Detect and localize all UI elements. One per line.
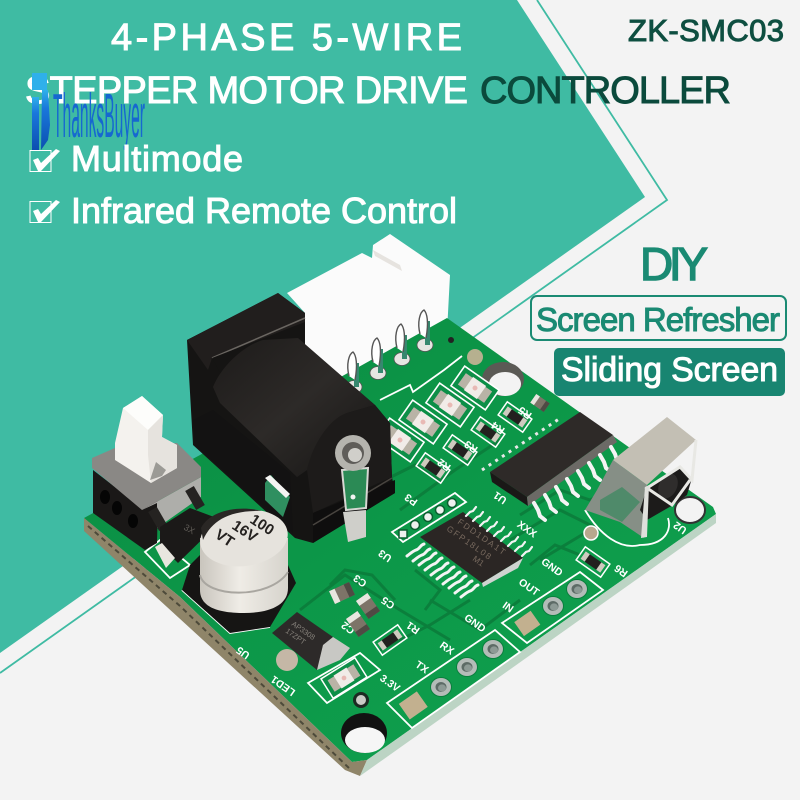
silkscreen labels: R5	[516, 404, 534, 421]
silkscreen labels: LED1	[269, 673, 298, 698]
IR receiver	[584, 417, 705, 540]
screw terminal pads upper	[514, 579, 588, 636]
title line 2 dark part: CONTROLLER	[480, 70, 731, 112]
electrolytic capacitor: VT	[212, 526, 237, 551]
silkscreen labels: R2	[435, 456, 453, 473]
silkscreen outlines	[145, 356, 669, 728]
push button switch	[92, 396, 205, 550]
electrolytic capacitor	[182, 504, 296, 633]
chip U3: GFP18L08	[445, 523, 493, 562]
PCB right edge	[360, 514, 716, 776]
silkscreen labels: OUT	[516, 576, 542, 599]
watermark logo	[32, 73, 145, 151]
top mounting hole	[482, 362, 524, 396]
PCB front edge texture	[88, 526, 350, 769]
pad by connector	[448, 337, 483, 365]
silkscreen labels: TX	[413, 659, 431, 676]
chip U3: M1	[471, 553, 486, 569]
connector pins	[346, 310, 433, 394]
title line 1: 4-PHASE 5-WIRE	[111, 17, 462, 59]
silkscreen labels: R6	[612, 562, 630, 579]
DIY heading: DIY	[640, 238, 708, 290]
silkscreen labels: C2	[339, 619, 357, 636]
silkscreen labels: P3	[402, 491, 420, 508]
silkscreen labels: C3	[351, 572, 369, 589]
silkscreen labels: GND	[462, 612, 488, 635]
teal panel	[0, 0, 645, 653]
silkscreen labels: R1	[404, 619, 422, 636]
silkscreen labels: U2	[671, 519, 689, 536]
status LEDs	[376, 366, 499, 462]
silkscreen labels: U5	[234, 644, 252, 661]
badge: screen refresher: Screen Refresher	[536, 301, 780, 338]
ceramic capacitors	[329, 582, 380, 637]
title line 2 white part: STEPPER MOTOR DRIVE	[25, 70, 468, 112]
PCB top surface	[84, 318, 716, 762]
silkscreen labels: IN	[500, 600, 515, 615]
silkscreen labels: XXX	[515, 519, 539, 540]
white motor connector	[287, 234, 450, 392]
silkscreen labels: R4	[489, 419, 507, 436]
silkscreen labels: R3	[462, 438, 480, 455]
PCB front edge	[84, 518, 367, 776]
silkscreen labels	[234, 404, 689, 698]
text: ThanksBuyer	[53, 82, 145, 151]
power LED	[321, 658, 367, 698]
serial header pads lower	[399, 639, 504, 720]
model number: ZK-SMC03	[628, 13, 784, 48]
resistors R2 to R5	[373, 394, 610, 655]
bottom mounting hole	[341, 692, 387, 753]
diode D1: 3X	[182, 522, 197, 536]
P3 header holes	[399, 498, 456, 538]
silkscreen labels: C5	[379, 594, 397, 611]
badge: sliding screen: Sliding Screen	[561, 351, 778, 389]
feature: infrared remote control: Infrared Remote Control	[71, 190, 457, 231]
teal chevron outline	[0, 0, 667, 673]
voltage regulator U5: AP3308	[290, 619, 317, 642]
chip U3: FDD1DA1T	[456, 516, 507, 557]
chip U1	[482, 412, 622, 520]
electrolytic capacitor: 16V	[229, 517, 260, 546]
PCB traces	[300, 440, 610, 650]
diode D1	[155, 508, 222, 568]
DC power jack	[187, 293, 395, 543]
voltage regulator U5	[272, 612, 350, 671]
voltage regulator U5: 17ZPT	[284, 626, 308, 647]
silkscreen labels: RX	[437, 639, 456, 658]
silkscreen labels: GND	[539, 556, 565, 579]
silkscreen labels: U3	[376, 547, 394, 564]
feature: multimode: Multimode	[71, 138, 243, 179]
chip U3	[407, 507, 532, 597]
silkscreen labels: 3.3V	[377, 672, 402, 695]
electrolytic capacitor: 100	[247, 511, 277, 539]
photo: stepper driver circuit board	[84, 234, 716, 776]
silkscreen labels: U1	[491, 489, 509, 506]
